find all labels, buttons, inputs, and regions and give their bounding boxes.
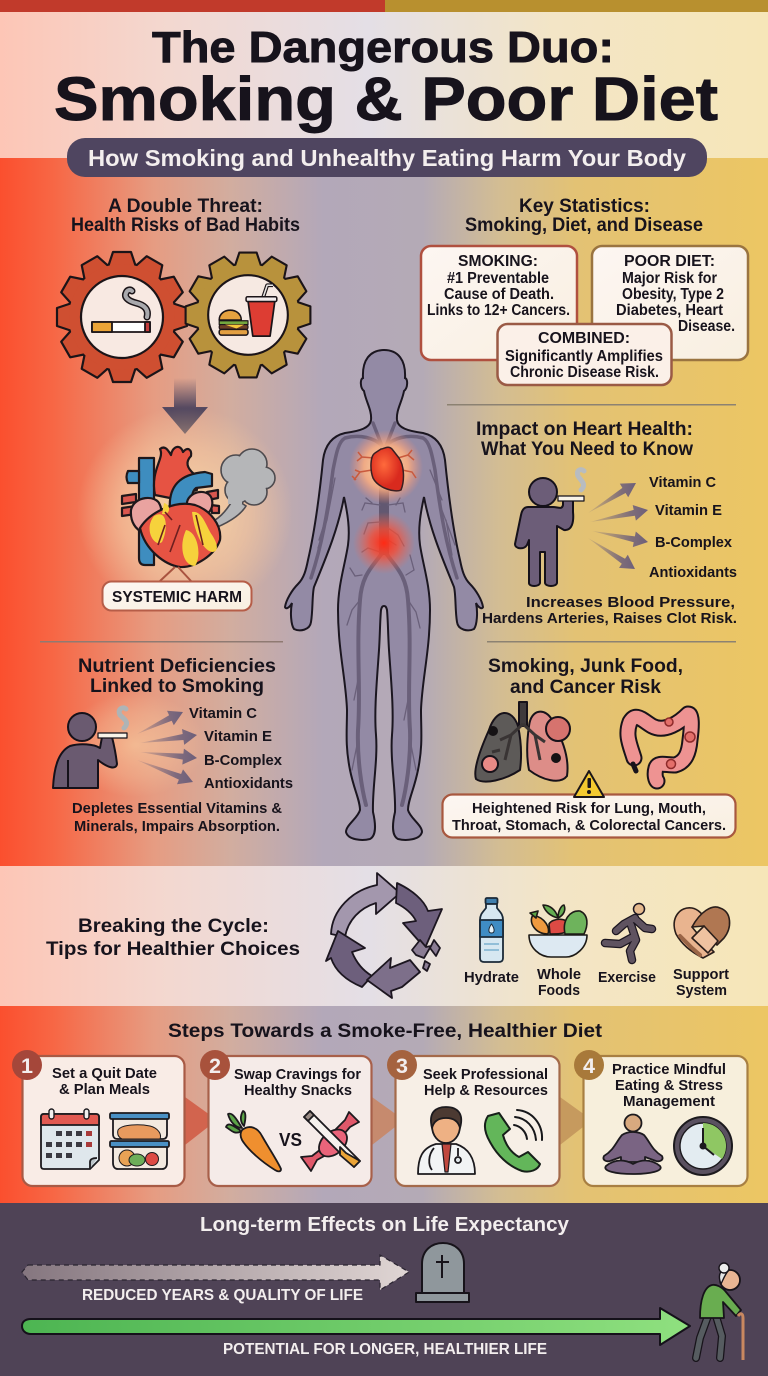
icon: smoke cloud (206, 449, 275, 530)
nutrient labels: Vitamin E (204, 729, 272, 745)
heading: key statistics: Smoking, Diet, and Disease (465, 215, 703, 236)
panel: nutrient deficiencies (53, 656, 293, 835)
heading: a double threat: A Double Threat: (108, 196, 263, 217)
tip labels: Support (673, 966, 729, 983)
card: smoking: Cause of Death. (444, 286, 554, 303)
card: combined: Chronic Disease Risk. (510, 364, 659, 381)
card: combined (498, 324, 672, 385)
title: Smoking & Poor Diet (54, 65, 718, 133)
icon: calendar (41, 1109, 99, 1169)
label: systemic harm (102, 567, 252, 610)
card: poor diet: Disease. (678, 318, 735, 335)
card: poor diet: Obesity, Type 2 (622, 286, 724, 303)
card: poor diet: Major Risk for (622, 270, 717, 287)
icon: handshake heart (674, 907, 730, 958)
step card 3 (387, 1050, 560, 1186)
heading: steps: Steps Towards a Smoke-Free, Healthier Diet (168, 1020, 603, 1042)
icon: smoker bust (53, 708, 127, 788)
vessels (311, 423, 457, 805)
step card 4: Practice Mindful (612, 1061, 726, 1078)
heading: impact on heart health (476, 419, 693, 460)
label: longer life: POTENTIAL FOR LONGER, HEALTHIER LIFE (223, 1341, 547, 1358)
icon: warning triangle (574, 771, 604, 797)
heading: cancer risk (488, 655, 683, 698)
step card 4: 4 (583, 1055, 595, 1078)
arrow: step 1 to 2 (185, 1097, 217, 1145)
step card 3: Seek Professional (423, 1066, 548, 1083)
icon: doctor (418, 1107, 475, 1174)
arrow: step 3 to 4 (560, 1097, 592, 1145)
heart arteries (352, 450, 416, 480)
icon: candy and cigarette crossed (301, 1111, 360, 1171)
header panel (0, 12, 768, 158)
panel: a double threat (57, 196, 310, 617)
step card 2 (200, 1050, 372, 1186)
abdomen glow (353, 512, 415, 574)
icon: clock (674, 1117, 732, 1175)
nutrient labels: B-Complex (204, 753, 282, 769)
panel: life expectancy (0, 1203, 768, 1376)
tip labels: Exercise (598, 969, 656, 986)
icon: elderly person with cane (696, 1263, 743, 1360)
nutrient labels: Vitamin C (189, 706, 258, 722)
icon: broken cycle arrows (326, 873, 442, 998)
arrow: step 2 to 3 (372, 1097, 404, 1145)
panel: steps (0, 1006, 768, 1203)
heading: impact on heart health: Impact on Heart Health: (476, 419, 693, 440)
heading: cancer risk: and Cancer Risk (510, 676, 661, 698)
title: The Dangerous Duo: (152, 23, 614, 72)
callout: cancer risk: Heightened Risk for Lung, Mouth, (472, 800, 706, 817)
nutrient labels: Antioxidants (649, 564, 737, 581)
glow behind heart (77, 407, 293, 617)
heading: impact on heart health: What You Need to Know (481, 439, 693, 460)
icon: water bottle (480, 898, 503, 962)
text: vs: VS (279, 1130, 302, 1150)
heading: nutrient deficiencies: Linked to Smoking (90, 676, 264, 697)
arrow: longer life (22, 1308, 690, 1345)
nutrient labels (189, 706, 293, 792)
nutrient labels: Antioxidants (204, 776, 293, 792)
icon: lungs (475, 702, 570, 782)
nutrient labels: Vitamin E (655, 502, 722, 519)
icon: human body with vessels (285, 350, 483, 840)
main panel background (0, 158, 768, 866)
tip labels: System (676, 982, 727, 999)
card: smoking: SMOKING: (458, 253, 538, 270)
step card 3: Help & Resources (424, 1082, 548, 1099)
panel: key statistics (421, 196, 748, 385)
arrows: nutrient depletion (137, 711, 197, 784)
heading: key statistics: Key Statistics: (519, 196, 650, 217)
icon: damaged heart (122, 447, 220, 567)
card: poor diet: POOR DIET: (624, 253, 715, 270)
icon: meditating person (603, 1114, 663, 1174)
step card 1: Set a Quit Date (52, 1065, 157, 1082)
tip labels: Whole (537, 966, 581, 983)
heading: breaking the cycle: Breaking the Cycle: (78, 915, 269, 937)
nutrient caption: Minerals, Impairs Absorption. (74, 818, 280, 835)
icon: salad bowl (529, 905, 587, 957)
step card 1 (12, 1050, 184, 1186)
nutrient labels: B-Complex (655, 534, 733, 551)
step card 3: 3 (396, 1055, 408, 1078)
step card 4: Eating & Stress (615, 1077, 723, 1094)
heading: life expectancy: Long-term Effects on Life Expectancy (200, 1214, 570, 1236)
panel: breaking the cycle (0, 866, 768, 1006)
heart health caption: Hardens Arteries, Raises Clot Risk. (482, 610, 737, 627)
icon: carrot (226, 1111, 281, 1171)
icon: phone (485, 1110, 542, 1172)
heading: nutrient deficiencies: Nutrient Deficiencies (78, 656, 276, 677)
glow (65, 693, 205, 797)
callout: cancer risk (442, 794, 736, 838)
heading: breaking the cycle: Tips for Healthier Choices (46, 938, 300, 960)
card: poor diet: Diabetes, Heart (616, 302, 723, 319)
tip labels: Foods (538, 982, 580, 999)
callout: cancer risk: Throat, Stomach, & Colorectal Cancers. (452, 817, 726, 834)
panel: impact on heart health (476, 419, 737, 627)
card: combined: COMBINED: (538, 330, 630, 347)
label: systemic harm: SYSTEMIC HARM (112, 589, 242, 606)
heading: cancer risk: Smoking, Junk Food, (488, 655, 683, 677)
icon: junk food gear (186, 253, 310, 377)
icon: runner (605, 904, 652, 960)
heading: a double threat: Health Risks of Bad Habits (71, 215, 300, 236)
step card 2: Swap Cravings for (234, 1066, 361, 1083)
nutrient labels: Vitamin C (649, 474, 716, 491)
arrows: nutrient loss (588, 483, 648, 569)
tip labels: Hydrate (464, 969, 519, 986)
nutrient caption: Depletes Essential Vitamins & (72, 800, 282, 817)
step card 1: 1 (21, 1055, 33, 1078)
icon: tombstone (416, 1243, 469, 1302)
body heart (371, 447, 403, 491)
nutrient caption (72, 800, 282, 835)
arrow: habits to heart (162, 378, 208, 434)
card: smoking (421, 246, 577, 360)
subtitle pill (67, 138, 707, 177)
card: poor diet (592, 246, 748, 360)
heart health caption (482, 594, 737, 627)
step card 4: Management (623, 1093, 715, 1110)
arrow: reduced years (22, 1255, 409, 1290)
icon: smoking gear (57, 252, 187, 382)
tip labels (464, 966, 729, 999)
subtitle pill: How Smoking and Unhealthy Eating Harm Your Body (88, 145, 686, 171)
icon: smoker figure (515, 470, 584, 586)
step card 1: & Plan Meals (59, 1081, 150, 1098)
card: smoking: Links to 12+ Cancers. (427, 302, 570, 319)
nutrient labels (649, 474, 737, 581)
heading: nutrient deficiencies (78, 656, 276, 697)
icon: meal boxes (110, 1113, 169, 1169)
label: reduced years: REDUCED YEARS & QUALITY OF LIFE (82, 1287, 363, 1304)
panel: cancer risk (442, 655, 736, 838)
title (54, 23, 718, 133)
heading: breaking the cycle (46, 915, 300, 960)
step card 2: 2 (209, 1055, 221, 1078)
heading: a double threat (71, 196, 300, 236)
step card 4 (574, 1050, 748, 1186)
heart glow (349, 430, 423, 504)
step card 2: Healthy Snacks (244, 1082, 352, 1099)
icon: colon (628, 714, 695, 781)
top colour strip (0, 0, 768, 12)
card: combined: Significantly Amplifies (505, 348, 663, 365)
heart health caption: Increases Blood Pressure, (526, 594, 735, 611)
card: smoking: #1 Preventable (447, 270, 549, 287)
heading: key statistics (465, 196, 703, 236)
